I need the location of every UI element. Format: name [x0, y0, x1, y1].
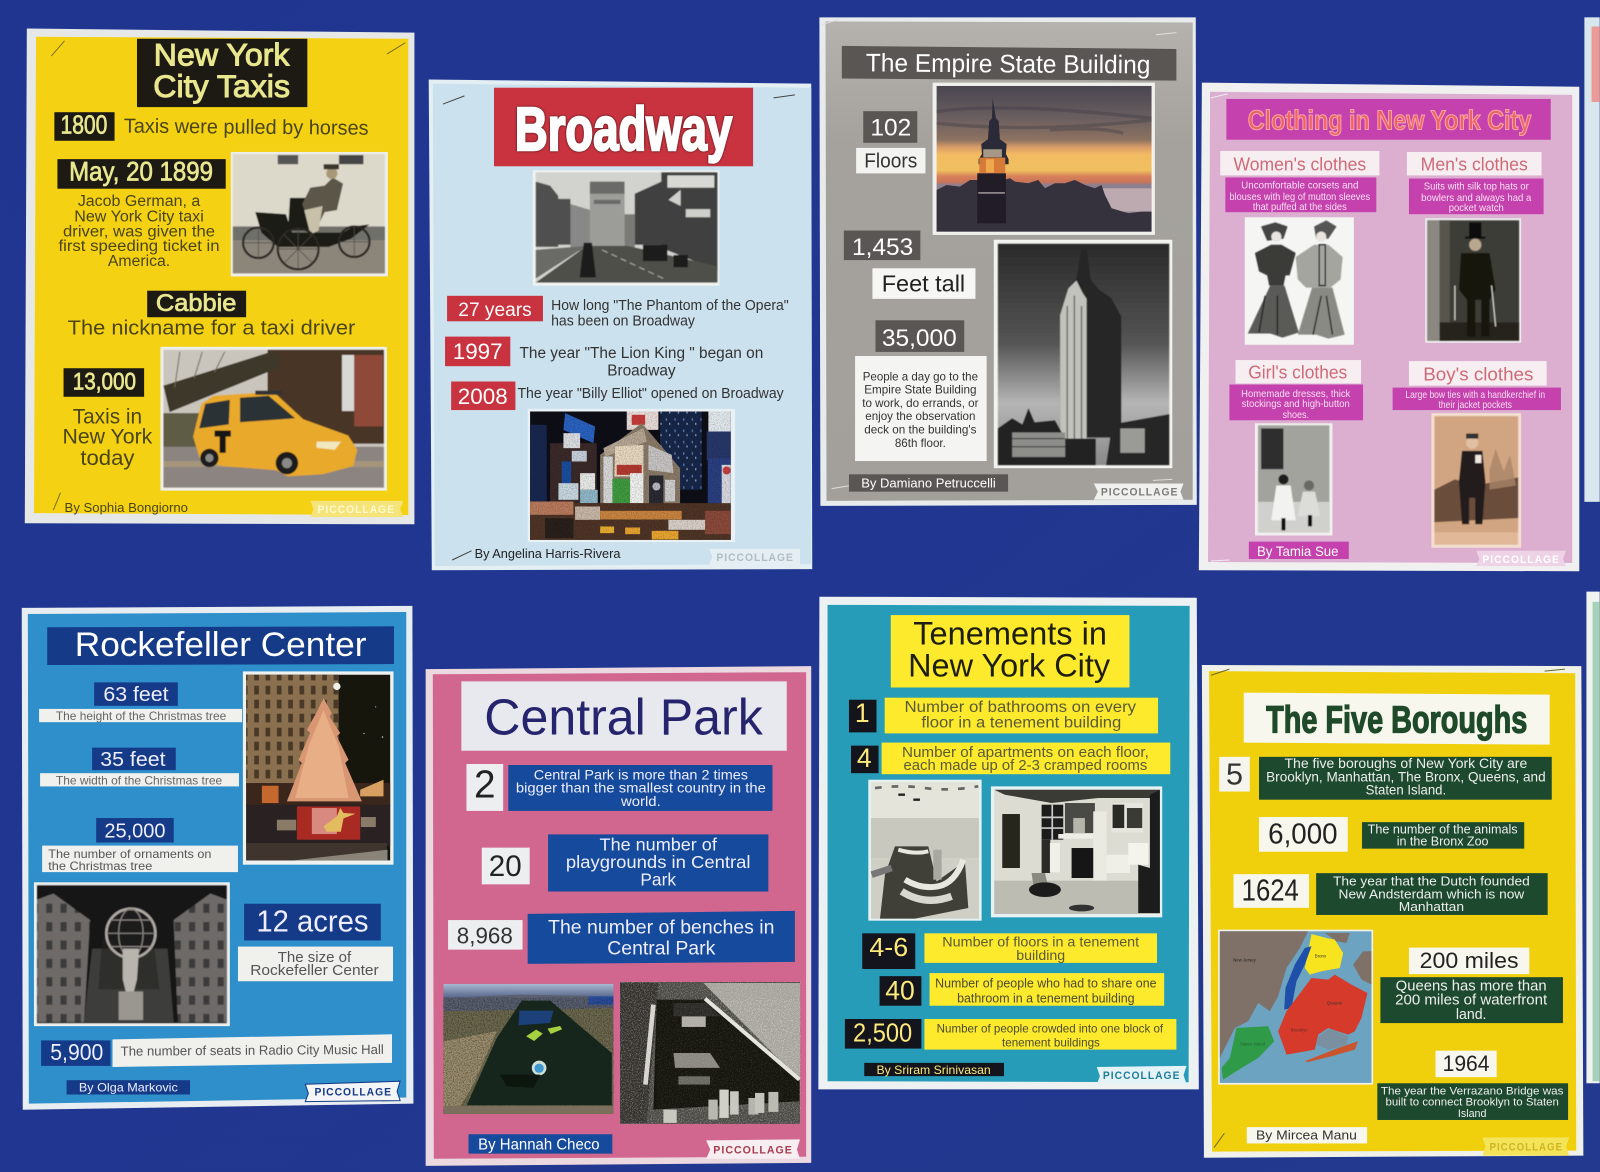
fact: 8,968: The number of benches in	[548, 916, 774, 938]
fact: 1,453 feet tall: Feet tall	[882, 271, 965, 297]
map: five boroughs: Queens	[1327, 1001, 1342, 1006]
section: boy's clothes: Large bow ties with a handkerchief in	[1405, 390, 1545, 401]
section: girl's clothes: Girl's clothes	[1248, 361, 1347, 382]
fact: 5,900: 5,900	[50, 1039, 103, 1065]
photo: Christmas tree	[243, 671, 394, 865]
fact: 63 feet	[39, 682, 242, 723]
fact: 35,000 people a day: deck on the building's	[864, 423, 976, 437]
fact: 35,000 people a day: 86th floor.	[895, 436, 946, 450]
logo: PicCollage	[305, 1081, 400, 1102]
title: Rockefeller Center: Rockefeller Center	[75, 626, 366, 664]
fact: 13,000: today	[80, 446, 135, 470]
neighbouring poster edge, bottom right	[1586, 592, 1600, 1083]
fact: 4 apartments	[851, 743, 1170, 774]
section: men's clothes: Men's clothes	[1421, 153, 1528, 174]
title: New York City Taxis: City Taxis	[153, 68, 290, 104]
title: The Five Boroughs	[1244, 693, 1550, 745]
logo: PicCollage: PICCOLLAGE	[1482, 554, 1560, 566]
fact: May 20 1899: May, 20 1899	[69, 157, 213, 187]
fact: 20: 20	[489, 850, 522, 883]
panel: Broadway	[429, 80, 812, 570]
fact: 1997: The year "The Lion King " began on	[519, 345, 763, 362]
fact: 25,000	[42, 818, 238, 873]
fact: 35 feet: The width of the Christmas tree	[56, 774, 222, 787]
fact: May 20 1899	[57, 157, 226, 270]
fact: 13,000: New York	[63, 425, 153, 449]
fact: 2: Central Park is more than 2 times	[534, 767, 748, 782]
fact: 2,500 people: tenement buildings	[1002, 1036, 1100, 1050]
fact: 1997: 1997	[453, 339, 503, 364]
photo: girls walking	[1255, 423, 1332, 536]
fact: 4-6 floors	[862, 933, 1157, 969]
fact: 35 feet	[40, 748, 239, 787]
fact: 1800: Taxis were pulled by horses	[124, 116, 369, 140]
neighbouring poster edge, top right	[1584, 17, 1600, 502]
fact: 200 miles: 200 miles	[1420, 948, 1519, 973]
fact: 12 acres	[238, 904, 393, 981]
byline: By Mircea Manu	[1256, 1127, 1357, 1142]
photo: Times Square at night	[528, 409, 735, 542]
fact: 2,500 people: 2,500	[853, 1019, 912, 1047]
section: men's clothes	[1407, 152, 1544, 214]
fact: 1624	[1234, 873, 1548, 915]
photo: women's dresses engraving	[1245, 217, 1354, 345]
title: Central Park: Central Park	[484, 688, 763, 745]
fact: 200 miles: 200 miles of waterfront	[1395, 993, 1547, 1009]
section: girl's clothes: Homemade dresses, thick	[1241, 389, 1351, 400]
fact: 4 apartments: Number of apartments on each floor,	[902, 745, 1149, 761]
fact: 35,000 people a day	[855, 320, 987, 461]
logo: PicCollage: PICCOLLAGE	[314, 1086, 392, 1098]
fact: 1964: Island	[1458, 1108, 1486, 1120]
logo: PicCollage: PICCOLLAGE	[716, 552, 794, 564]
fact: 2: bigger than the smallest country in the	[516, 781, 766, 796]
fact: 5 boroughs: Staten Island.	[1366, 783, 1446, 798]
section: boy's clothes	[1393, 361, 1561, 411]
panel: Tenements in New York City	[818, 597, 1199, 1089]
fact: 25,000: The number of ornaments on	[48, 847, 212, 861]
fact: 25,000: the Christmas tree	[48, 859, 152, 873]
fact: 1 bathroom: floor in a tenement building	[921, 714, 1121, 731]
fact: 8,968: Central Park	[607, 938, 716, 960]
fact: 40 people	[880, 973, 1164, 1006]
byline: By Olga Markovic	[79, 1080, 178, 1094]
byline: By Angelina Harris-Rivera	[475, 546, 621, 561]
fact: 4-6 floors: building	[1016, 948, 1065, 963]
fact: 1624: Manhattan	[1399, 899, 1464, 914]
section: girl's clothes: shoes.	[1282, 410, 1309, 421]
fact: 2,500 people: Number of people crowded into one block of	[937, 1021, 1164, 1035]
map: five boroughs: Staten Island	[1240, 1041, 1266, 1046]
fact: 1,453 feet tall: 1,453	[852, 234, 913, 261]
fact: 5 boroughs: 5	[1226, 757, 1243, 791]
photo: yellow taxi under bridge	[160, 347, 387, 491]
section: women's clothes: Women's clothes	[1234, 153, 1366, 174]
title: Tenements in New York City	[891, 615, 1129, 687]
logo: PicCollage: PICCOLLAGE	[1490, 1142, 1563, 1154]
logo: PicCollage: PICCOLLAGE	[318, 504, 395, 516]
fact: 200 miles: Queens has more than	[1396, 978, 1547, 994]
fact: 35,000 people a day: People a day go to the	[863, 369, 978, 383]
fact: 5,900: The number of seats in Radio City Music Hall	[121, 1042, 384, 1059]
panel: The Empire State Building	[819, 17, 1197, 506]
fact: 40 people: 40	[885, 976, 915, 1006]
fact: 102 floors: Floors	[864, 150, 917, 172]
fact: 1800	[54, 112, 369, 141]
fact: 102 floors: 102	[870, 115, 911, 142]
title: Broadway	[494, 88, 753, 166]
logo: PicCollage: PICCOLLAGE	[1103, 1070, 1180, 1082]
fact: 40 people: bathroom in a tenement building	[957, 991, 1135, 1006]
photo: historic Times Square	[533, 170, 719, 286]
fact: 63 feet: 63 feet	[103, 684, 169, 706]
logo: PicCollage	[1094, 483, 1184, 500]
title: Tenements in New York City: New York City	[908, 646, 1111, 683]
fact: 1800: 1800	[60, 112, 107, 140]
fact: 27 years: How long "The Phantom of the Opera"	[551, 298, 789, 314]
fact: 1964: 1964	[1443, 1051, 1490, 1076]
logo: PicCollage	[310, 501, 403, 517]
map: five boroughs: Bronx	[1315, 953, 1327, 958]
fact: May 20 1899: driver, was given the	[63, 224, 215, 241]
fact: 1624: The year that the Dutch founded	[1333, 873, 1530, 888]
fact: 35 feet: 35 feet	[100, 749, 166, 771]
section: men's clothes: bowlers and always had a	[1421, 193, 1532, 204]
fact: 63 feet: The height of the Christmas tree	[56, 710, 226, 723]
fact: May 20 1899: America.	[108, 253, 170, 270]
title: The Five Boroughs: The Five Boroughs	[1266, 698, 1527, 740]
logo: PicCollage	[706, 1139, 800, 1159]
fact: 13,000	[63, 368, 153, 470]
fact: 200 miles: land.	[1456, 1007, 1486, 1023]
fact: 1 bathroom: Number of bathrooms on every	[905, 699, 1136, 716]
section: girl's clothes: stockings and high-button	[1242, 399, 1350, 410]
photo: aerial Central Park colour	[443, 984, 613, 1114]
fact: 4 apartments: 4	[857, 743, 872, 773]
fact: 1964: built to connect Brooklyn to Staten	[1385, 1097, 1559, 1109]
fact: Cabbie	[68, 290, 355, 340]
fact: 6,000 animals: The number of the animals	[1368, 821, 1518, 836]
title: Clothing in New York City: Clothing in New York City	[1248, 105, 1532, 136]
section: women's clothes: that puffed at the sides	[1253, 202, 1347, 213]
fact: 1 bathroom	[849, 698, 1158, 733]
fact: 27 years: has been on Broadway	[551, 313, 696, 329]
fact: 8,968	[448, 911, 795, 964]
byline: By Hannah Checo	[478, 1137, 600, 1154]
photo: Empire State black and white	[994, 240, 1172, 468]
panel: The Five Boroughs	[1202, 665, 1583, 1158]
fact: May 20 1899: New York City taxi	[74, 208, 204, 225]
photo: Atlas statue	[34, 882, 230, 1026]
photo: tenement courtyard	[868, 780, 982, 921]
fact: 5 boroughs: Brooklyn, Manhattan, The Bronx, Queens, and	[1266, 769, 1546, 784]
fact: 20: The number of	[600, 835, 717, 855]
photo: tenement room	[991, 786, 1162, 917]
fact: 1624: 1624	[1242, 874, 1299, 908]
map: five boroughs: New Jersey	[1233, 957, 1257, 962]
logo: PicCollage: PICCOLLAGE	[1101, 487, 1178, 499]
fact: 6,000 animals	[1259, 817, 1524, 852]
fact: 6,000 animals: 6,000	[1268, 819, 1338, 851]
fact: 5 boroughs	[1219, 756, 1552, 800]
fact: 6,000 animals: in the Bronx Zoo	[1397, 834, 1489, 849]
fact: 5 boroughs: The five boroughs of New York City are	[1285, 756, 1528, 771]
fact: May 20 1899: Jacob German, a	[78, 193, 200, 210]
photo: Empire State at sunset	[933, 83, 1155, 235]
fact: 12 acres: The size of	[278, 950, 352, 966]
byline: By Sophia Bongiorno	[65, 500, 188, 515]
section: women's clothes: blouses with leg of mutton sleeves	[1229, 192, 1370, 203]
title: New York City Taxis: New York	[154, 36, 290, 72]
fact: 2: world.	[620, 794, 661, 809]
fact: 20: Park	[640, 869, 676, 889]
fact: 5,900	[41, 1034, 392, 1067]
byline: By Tamia Sue	[1257, 544, 1339, 560]
logo: PicCollage: PICCOLLAGE	[713, 1145, 793, 1157]
fact: 12 acres: 12 acres	[256, 904, 369, 938]
fact: Cabbie: Cabbie	[156, 290, 236, 317]
title: The Empire State Building: The Empire State Building	[866, 49, 1151, 79]
photo: aerial Central Park black and white	[620, 982, 800, 1124]
fact: 2	[466, 764, 772, 811]
photo: man in top hat	[1425, 218, 1521, 343]
panel: New York City Taxis	[25, 29, 414, 524]
fact: 12 acres: Rockefeller Center	[250, 963, 379, 979]
fact: 8,968: 8,968	[457, 923, 513, 949]
section: women's clothes	[1220, 151, 1379, 213]
fact: 4-6 floors: Number of floors in a tenement	[942, 935, 1139, 950]
fact: 1997	[445, 337, 763, 379]
fact: 1964	[1377, 1051, 1568, 1120]
fact: 20	[482, 834, 768, 891]
title: Clothing in New York City	[1226, 99, 1551, 140]
section: men's clothes: Suits with silk top hats or	[1424, 182, 1529, 193]
logo: PicCollage	[709, 549, 800, 565]
fact: 35,000 people a day: Empire State Building	[864, 383, 977, 397]
logo: PicCollage	[1482, 1137, 1569, 1156]
section: women's clothes: Uncomfortable corsets and	[1241, 181, 1359, 192]
fact: 1,453 feet tall	[844, 231, 975, 299]
fact: Cabbie: The nickname for a taxi driver	[68, 318, 355, 340]
photo: boy in suit	[1431, 413, 1521, 548]
section: girl's clothes	[1229, 360, 1363, 421]
byline: By Damiano Petruccelli	[861, 476, 996, 491]
section: boy's clothes: Boy's clothes	[1423, 363, 1533, 384]
fact: 102 floors	[856, 111, 925, 173]
fact: 1997: Broadway	[607, 362, 676, 379]
fact: 35,000 people a day: enjoy the observation	[865, 409, 976, 423]
fact: 2008: The year "Billy Elliot" opened on Broadway	[517, 386, 784, 402]
title: Tenements in New York City: Tenements in	[913, 615, 1107, 652]
fact: 2,500 people	[845, 1019, 1176, 1050]
fact: 40 people: Number of people who had to share one	[935, 975, 1156, 990]
map: five boroughs: Brooklyn	[1291, 1027, 1308, 1032]
title: New York City Taxis	[137, 36, 307, 107]
photo: early electric taxi	[231, 152, 388, 276]
fact: 2008: 2008	[458, 384, 508, 409]
fact: May 20 1899: first speeding ticket in	[58, 238, 220, 255]
fact: 13,000: Taxis in	[73, 404, 142, 428]
section: men's clothes: pocket watch	[1449, 203, 1504, 214]
title: Broadway: Broadway	[515, 95, 732, 163]
panel: Clothing in New York City	[1199, 83, 1579, 571]
fact: 2008	[451, 381, 784, 410]
fact: 4-6 floors: 4-6	[869, 934, 908, 962]
fact: 1 bathroom: 1	[855, 698, 870, 728]
fact: 27 years: 27 years	[458, 299, 532, 321]
map: five boroughs	[1218, 930, 1373, 1085]
logo: PicCollage	[1097, 1066, 1187, 1084]
section: boy's clothes: their jacket pockets	[1439, 400, 1512, 411]
fact: 35,000 people a day: to work, do errands, or	[862, 396, 979, 410]
fact: 20: playgrounds in Central	[566, 852, 751, 872]
fact: 200 miles	[1380, 948, 1563, 1023]
fact: 4 apartments: each made up of 2-3 cramped rooms	[904, 758, 1147, 774]
fact: 35,000 people a day: 35,000	[882, 325, 957, 352]
fact: 27 years	[447, 296, 789, 329]
fact: 2: 2	[474, 764, 496, 807]
fact: 13,000: 13,000	[73, 369, 136, 396]
fact: 1964: The year the Verrazano Bridge was	[1381, 1085, 1564, 1097]
panel: Rockefeller Center	[22, 606, 413, 1110]
panel: Central Park	[426, 666, 811, 1166]
fact: 25,000: 25,000	[104, 820, 166, 842]
byline: By Sriram Srinivasan	[877, 1063, 991, 1077]
fact: 1624: New Andsterdam which is now	[1339, 887, 1525, 902]
